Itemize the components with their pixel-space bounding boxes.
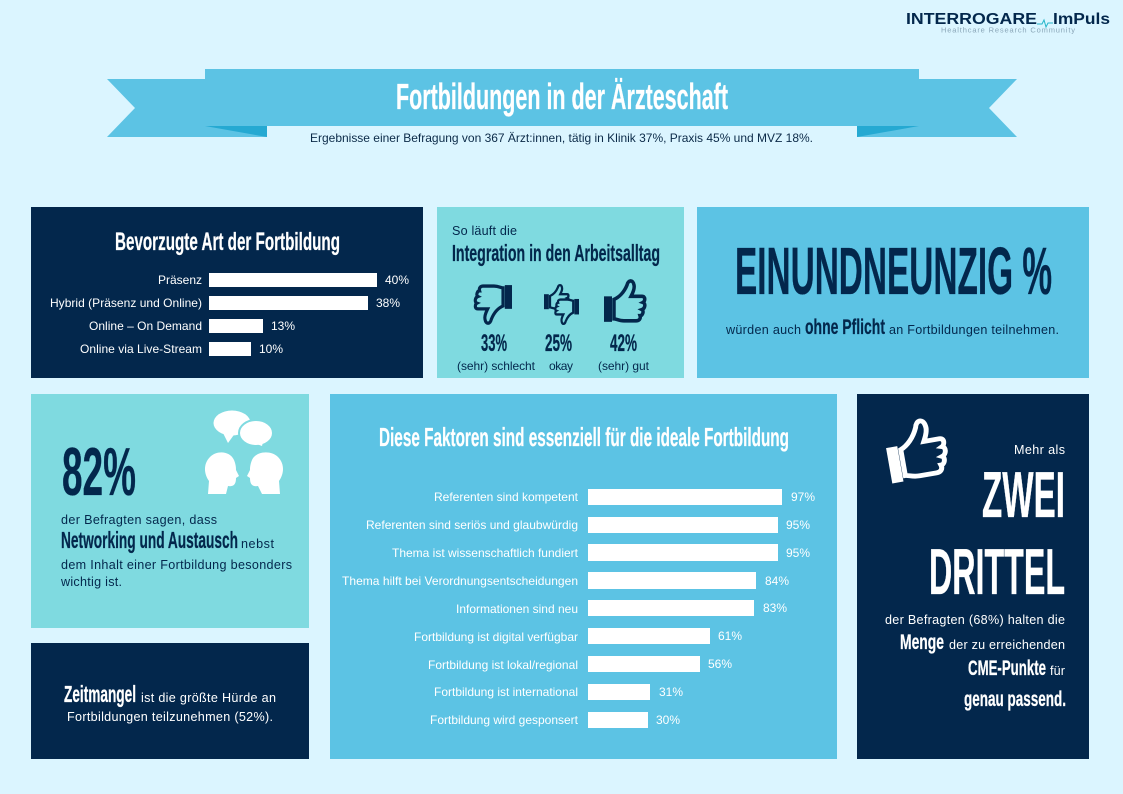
body text: networking: Networking und Austausch bbox=[61, 527, 238, 553]
stat: good: (sehr) gut bbox=[598, 359, 650, 373]
text: lack of time: ist die größte Hürde an bbox=[141, 691, 276, 705]
text: lack of time: Fortbildungen teilzunehmen (52%). bbox=[67, 710, 273, 724]
body text: networking bbox=[60, 513, 292, 589]
text: lack of time bbox=[64, 681, 276, 724]
body text: two thirds: für bbox=[1050, 664, 1065, 678]
body text: two thirds: Menge bbox=[900, 631, 944, 654]
body text: two thirds: CME-Punkte bbox=[968, 657, 1046, 680]
title ribbon bbox=[107, 69, 1017, 137]
caption: würden auch bbox=[725, 323, 801, 337]
bar chart: essential factors: Referenten sind kompetent bbox=[434, 490, 579, 504]
body text: networking: nebst bbox=[241, 537, 274, 551]
icon: thumb up bbox=[604, 281, 645, 322]
panel: lack of time bbox=[31, 643, 309, 759]
stat: bad: 33% bbox=[481, 330, 507, 357]
icon: thumb down bbox=[475, 285, 512, 323]
body text: two thirds: genau passend. bbox=[964, 688, 1066, 711]
icon: two heads talking bbox=[205, 410, 283, 494]
caption: ohne Pflicht bbox=[805, 316, 885, 339]
bar chart: preferred type: 13% bbox=[271, 319, 295, 333]
stat: okay bbox=[545, 330, 573, 373]
bar chart: essential factors: Thema ist wissenschaftlich fundiert bbox=[392, 546, 579, 560]
bar chart: essential factors: 31% bbox=[659, 685, 683, 699]
bar chart: preferred type: Präsenz bbox=[158, 273, 202, 287]
bar chart: essential factors: 84% bbox=[765, 574, 789, 588]
bar chart: essential factors: Fortbildung ist digital verfügbar bbox=[414, 630, 578, 644]
bar chart: essential factors: 61% bbox=[718, 629, 742, 643]
intro text: So läuft die bbox=[452, 224, 517, 238]
logo: Interrogare ImPuls: Healthcare Research Community bbox=[941, 26, 1075, 34]
body text: two thirds: der Befragten (68%) halten die bbox=[885, 613, 1065, 627]
heading: integration: Integration in den Arbeitsalltag bbox=[452, 240, 660, 266]
bar chart: preferred type: 10% bbox=[259, 342, 283, 356]
text: more than: Mehr als bbox=[1014, 443, 1065, 457]
stat: bad bbox=[457, 330, 536, 373]
logo: Interrogare ImPuls bbox=[906, 11, 1110, 34]
stat: okay: okay bbox=[549, 359, 573, 373]
panel: two thirds bbox=[857, 394, 1089, 759]
panel: integration into daily work bbox=[437, 207, 684, 378]
big number: 82%: 82% bbox=[62, 434, 136, 510]
bar chart: essential factors: Fortbildung ist lokal/regional bbox=[428, 658, 578, 672]
panel: ninety-one percent bbox=[697, 207, 1089, 378]
body text: two thirds: der zu erreichenden bbox=[949, 638, 1065, 652]
bar chart: essential factors: 95% bbox=[786, 546, 810, 560]
logo: Interrogare ImPuls: ImPuls bbox=[1053, 11, 1110, 28]
panel: networking bbox=[31, 394, 309, 628]
bar chart: essential factors: Referenten sind seriös und glaubwürdig bbox=[366, 518, 578, 532]
bar chart: preferred type: Hybrid (Präsenz und Online) bbox=[50, 296, 202, 310]
bar chart: essential factors: 95% bbox=[786, 518, 810, 532]
bar chart: essential factors: 30% bbox=[656, 713, 680, 727]
stat: okay: 25% bbox=[545, 330, 572, 357]
bar chart: preferred type: 38% bbox=[376, 296, 400, 310]
bar chart: preferred type bbox=[50, 273, 409, 356]
title: Fortbildungen in der Ärzteschaft bbox=[396, 76, 728, 117]
bar chart: preferred type: Online via Live-Stream bbox=[80, 342, 202, 356]
stat: good: 42% bbox=[610, 330, 637, 357]
body text: two thirds bbox=[885, 613, 1066, 711]
bar chart: essential factors: 56% bbox=[708, 657, 732, 671]
logo: Interrogare ImPuls: INTERROGARE bbox=[906, 11, 1037, 28]
icon: white thumb up bbox=[882, 417, 949, 483]
stat: bad: (sehr) schlecht bbox=[457, 359, 536, 373]
icon: thumbs up and down bbox=[544, 285, 579, 324]
text: lack of time: Zeitmangel bbox=[64, 681, 136, 707]
heading: preferred type: Bevorzugte Art der Fortbildung bbox=[115, 228, 340, 256]
bar chart: essential factors: Fortbildung ist international bbox=[434, 685, 578, 699]
body text: networking: der Befragten sagen, dass bbox=[61, 513, 217, 527]
caption: an Fortbildungen teilnehmen. bbox=[889, 323, 1059, 337]
panel: preferred type of training bbox=[31, 207, 423, 378]
bar chart: essential factors: Fortbildung wird gesponsert bbox=[430, 713, 579, 727]
bar chart: essential factors: Thema hilft bei Verordnungsentscheidungen bbox=[342, 574, 578, 588]
subtitle: Ergebnisse einer Befragung von 367 Ärzt:innen, tätig in Klinik 37%, Praxis 45% und MVZ 18%. bbox=[310, 131, 813, 145]
bar chart: essential factors: Informationen sind neu bbox=[456, 602, 578, 616]
bar chart: essential factors: 97% bbox=[791, 490, 815, 504]
bar chart: essential factors: 83% bbox=[763, 601, 787, 615]
heading: essential factors: Diese Faktoren sind essenziell für die ideale Fortbildung bbox=[379, 422, 789, 452]
panel: essential factors bbox=[330, 394, 837, 759]
bar chart: preferred type: 40% bbox=[385, 273, 409, 287]
stat: good bbox=[598, 330, 650, 373]
body text: networking: wichtig ist. bbox=[60, 575, 122, 589]
body text: networking: dem Inhalt einer Fortbildung besonders bbox=[61, 558, 292, 572]
caption bbox=[725, 316, 1059, 339]
bar chart: essential factors bbox=[342, 489, 815, 728]
bar chart: preferred type: Online – On Demand bbox=[89, 319, 202, 333]
